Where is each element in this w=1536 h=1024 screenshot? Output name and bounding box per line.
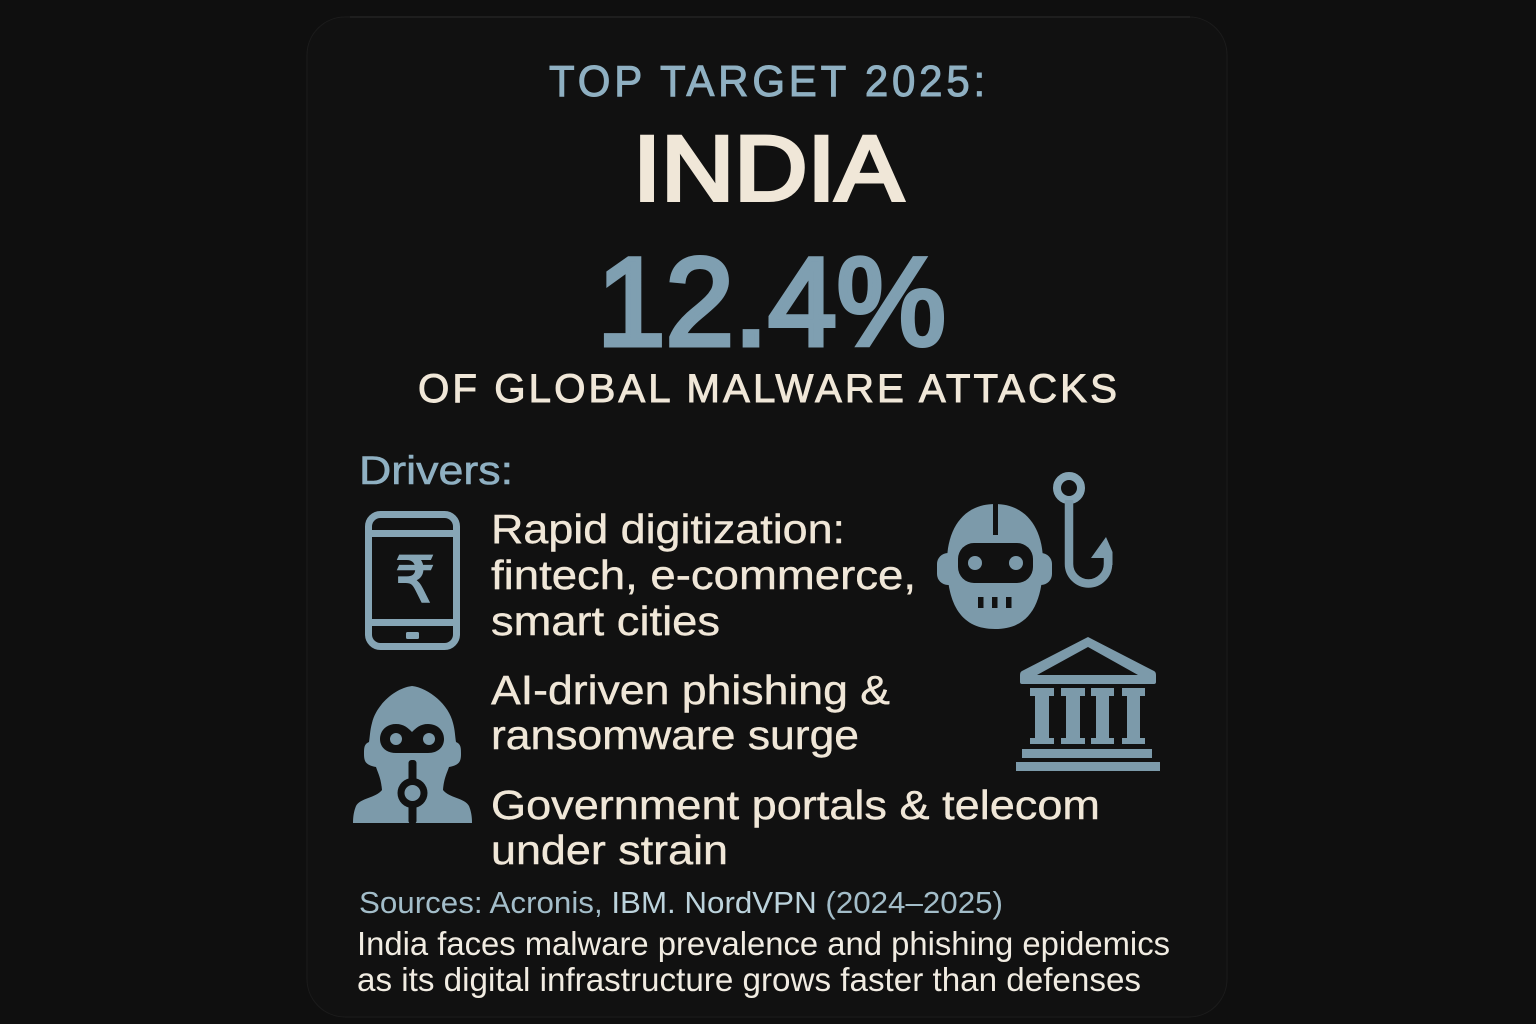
driver text: rapid digitization [491, 506, 916, 644]
icon: fishing hook [1057, 476, 1112, 584]
driver text: AI-driven phishing: ransomware surge [491, 712, 859, 758]
driver text: rapid digitization: fintech, e-commerce, [491, 552, 916, 598]
driver text: government portals: Government portals & telecom [491, 782, 1100, 828]
icon: government building [1016, 637, 1160, 771]
icon: hooded hacker [353, 686, 472, 824]
driver text: rapid digitization: smart cities [491, 598, 720, 644]
closing statement [357, 925, 1170, 998]
driver text: AI-driven phishing: AI-driven phishing & [491, 667, 890, 713]
driver text: government portals [491, 782, 1100, 873]
panel: main card [307, 17, 1227, 1017]
heading: drivers: Drivers: [359, 449, 513, 493]
statistic: 12.4%: 12.4% [597, 233, 946, 372]
closing statement: India faces malware prevalence and phishing epidemics [357, 925, 1170, 962]
title: top target: TOP TARGET 2025: [549, 57, 989, 106]
heading: India: INDIA [633, 118, 904, 220]
driver text: rapid digitization: Rapid digitization: [491, 506, 845, 552]
icon: phone with rupee: ₹ [395, 544, 435, 618]
icon: robot head [937, 503, 1052, 629]
sources line: Sources: Acronis, IBM. NordVPN (2024–2025) [359, 885, 1003, 920]
closing statement: as its digital infrastructure grows faster than defenses [357, 961, 1141, 998]
driver text: AI-driven phishing [491, 667, 890, 758]
subheading: of global malware attacks: OF GLOBAL MALWARE ATTACKS [418, 367, 1120, 411]
icon: phone with rupee [368, 514, 457, 646]
driver text: government portals: under strain [491, 827, 728, 873]
